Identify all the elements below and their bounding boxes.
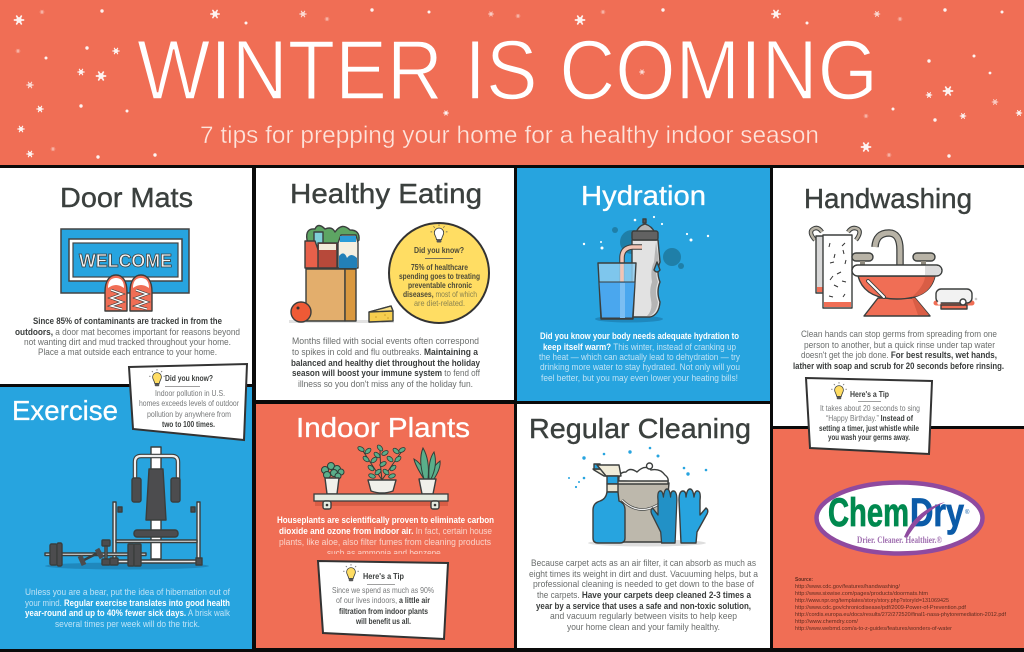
text: hydration body: feel better, but you may even lower your heating bills! <box>541 372 738 383</box>
heading: exercise: Exercise <box>12 395 118 426</box>
text: healthy eating body: illness so you don't miss any of the holiday fun. <box>298 378 473 389</box>
heading: door mats: Door Mats <box>60 182 193 213</box>
text: hydration body: Did you know your body needs adequate hydration to <box>540 330 739 341</box>
logo: chem-dry: Chem <box>828 491 909 535</box>
text: indoor plants body: plants, like aloe, also filter fumes from cleaning products <box>279 536 491 547</box>
text: regular cleaning body: the carpets. Have your carpets deep cleaned 2-3 times a <box>537 589 752 600</box>
text: sources: http://cordis.europa.eu/docs/results/272/272520/final1-nasa-phytoremediation-2012.pdf <box>795 612 1006 618</box>
text: sources: http://www.webmd.com/a-to-z-guides/features/wonders-of-water <box>795 626 952 632</box>
icon: light bulb <box>831 382 847 399</box>
text: healthy eating body <box>291 335 481 389</box>
callout text: spending goes to treating <box>399 272 480 281</box>
heading: handwashing: Handwashing <box>804 183 972 214</box>
text: regular cleaning body: professional cleaning is needed to get down to the base of <box>533 578 754 589</box>
text: exercise body: year-round and up to 40% fewer sick days. A brisk walk <box>25 607 230 618</box>
callout heading: Here's a Tip <box>850 389 889 399</box>
text: door mats body: Since 85% of contaminants are tracked in from the <box>33 315 222 326</box>
text: regular cleaning body: eight times its weight in dirt and dust. Vacuuming helps, but a <box>529 568 759 579</box>
callout text: Since we spend as much as 90% <box>332 586 434 595</box>
text: regular cleaning body: year by a service that uses a safe and non-toxic solution, <box>536 600 751 611</box>
text: exercise body <box>25 586 230 629</box>
heading: hydration: Hydration <box>581 180 706 211</box>
callout text: filtration from indoor plants <box>339 607 428 616</box>
text: sources: http://www.chemdry.com/ <box>795 619 859 625</box>
callout: indoor plants tip <box>318 561 448 639</box>
text: healthy eating body: to spikes in cold and flu outbreaks. Maintaining a <box>292 346 479 357</box>
heading: regular cleaning: Regular Cleaning <box>529 413 751 444</box>
text: regular cleaning body: and vacuum regularly between visits to help keep <box>550 610 737 621</box>
callout text <box>139 389 239 429</box>
icon: light bulb <box>343 564 359 581</box>
text: indoor plants body: dioxide and ozone from indoor air. In fact, certain house <box>279 525 492 536</box>
panel: hydration <box>517 168 770 401</box>
panel: regular cleaning <box>517 404 770 648</box>
text: door mats body: outdoors, a door mat becomes important for reasons beyond <box>15 326 240 337</box>
text: sources: http://www.cdc.gov/features/handwashing/ <box>795 584 901 590</box>
text: hydration body: the heat — which can actually lead to dehydration — try <box>539 351 740 362</box>
icon: sink, towel and soap <box>811 228 977 316</box>
text: healthy eating body: balanced and healthy diet throughout the holiday <box>291 357 481 368</box>
panel: logo and sources <box>773 429 1024 648</box>
icon: light bulb <box>149 369 165 386</box>
icon: water bottle and glass <box>583 216 709 322</box>
icon: welcome mat and shoes <box>61 229 189 311</box>
text: regular cleaning body <box>529 557 759 632</box>
heading: healthy eating: Healthy Eating <box>290 178 482 209</box>
logo: chem-dry: Drier. Cleaner. Healthier.® <box>857 535 942 545</box>
icon: spray bottle, bucket and gloves <box>568 447 708 546</box>
text: healthy eating body: season will boost your immune system to fend off <box>292 367 480 378</box>
text: indoor plants body: such as ammonia and benzene. <box>327 547 443 558</box>
text: indoor plants body: Houseplants are scientifically proven to eliminate carbon <box>277 514 494 525</box>
heading: indoor plants: Indoor Plants <box>296 412 470 443</box>
callout text <box>332 586 434 626</box>
logo: chem-dry <box>816 482 982 554</box>
callout text: of our lives indoors, a little air <box>336 596 431 605</box>
callout heading: Here's a Tip <box>363 571 404 581</box>
callout heading: Did you know? <box>414 245 464 255</box>
panel: indoor plants <box>256 404 514 648</box>
callout text <box>819 404 920 442</box>
callout: indoor pollution did you know <box>129 364 247 440</box>
callout text: preventable chronic <box>408 281 472 290</box>
text: hydration body <box>539 330 740 383</box>
text: handwashing body <box>793 328 1004 371</box>
logo: chem-dry: ® <box>965 509 970 516</box>
text: indoor plants body <box>277 514 494 562</box>
text: handwashing body: Clean hands can stop germs from spreading from one <box>801 328 997 339</box>
text: handwashing body: doesn't get the job done. For best results, wet hands, <box>801 349 997 360</box>
text: handwashing body: person to another, but a quick rinse under tap water <box>804 339 995 350</box>
icon: welcome mat and shoes: WELCOME <box>79 251 172 271</box>
callout text: pollution by anywhere from <box>147 410 231 419</box>
callout text: two to 100 times. <box>162 420 215 429</box>
callout text: are diet-related. <box>414 299 465 308</box>
callout text: Indoor pollution in U.S. <box>155 389 225 398</box>
text: hydration body: keep itself warm? This winter, instead of cranking up <box>543 341 736 352</box>
callout text: diseases, most of which <box>403 290 477 299</box>
text: door mats body: not wanting dirt and mud tracked throughout your home. <box>24 336 231 347</box>
callout: healthcare spending <box>389 223 489 323</box>
text: exercise body: several times per week will do the trick. <box>55 618 200 629</box>
text: sources: http://www.sixwise.com/pages/products/doormats.htm <box>795 591 929 597</box>
text: sources: http://www.cdc.gov/chronicdisease/pdf/2009-Power-of-Prevention.pdf <box>795 605 967 611</box>
icon: home gym <box>45 447 209 570</box>
callout text: It takes about 20 seconds to sing <box>820 404 920 413</box>
icon: grocery bag <box>289 226 394 323</box>
panel: exercise <box>0 387 252 649</box>
callout text: will benefit us all. <box>355 617 411 626</box>
text: door mats body <box>15 315 240 357</box>
logo: chem-dry: Dry <box>910 491 965 535</box>
text: exercise body: your mind. Regular exercise translates into good health <box>25 597 230 608</box>
title: WINTER IS COMING <box>137 23 878 117</box>
callout heading: Did you know? <box>165 373 213 383</box>
callout: handwashing tip <box>806 378 932 454</box>
icon: light bulb <box>430 224 448 243</box>
panel: door mats <box>0 168 252 384</box>
snowflakes <box>14 8 1022 159</box>
callout text: “Happy Birthday.” Instead of <box>826 414 913 423</box>
text: door mats body: Place a mat outside each entrance to your home. <box>38 346 217 357</box>
text: regular cleaning body: Because carpet acts as an air filter, it can absorb as much as <box>531 557 756 568</box>
callout text: homes exceeds levels of outdoor <box>139 399 239 408</box>
panel: handwashing <box>773 168 1024 426</box>
text: sources: http://www.npr.org/templates/story/story.php?storyId=131069425 <box>795 598 949 604</box>
callout text: you wash your germs away. <box>828 433 910 442</box>
text: hydration body: drinking more water to stay hydrated. Not only will you <box>540 361 740 372</box>
subtitle: 7 tips for prepping your home for a healthy indoor season <box>200 122 819 149</box>
panel: healthy eating <box>256 168 514 400</box>
header banner <box>0 0 1024 165</box>
callout text <box>399 263 480 308</box>
text: sources: Source: <box>795 577 813 583</box>
text: regular cleaning body: your home clean and your family healthy. <box>567 621 720 632</box>
callout text: 75% of healthcare <box>411 263 468 272</box>
icon: potted plants on shelf <box>314 444 448 509</box>
text: exercise body: Unless you are a bear, put the idea of hibernation out of <box>25 586 230 597</box>
callout text: setting a timer, just whistle while <box>819 424 919 433</box>
text: sources <box>795 577 1006 632</box>
text: healthy eating body: Months filled with social events often correspond <box>292 335 479 346</box>
